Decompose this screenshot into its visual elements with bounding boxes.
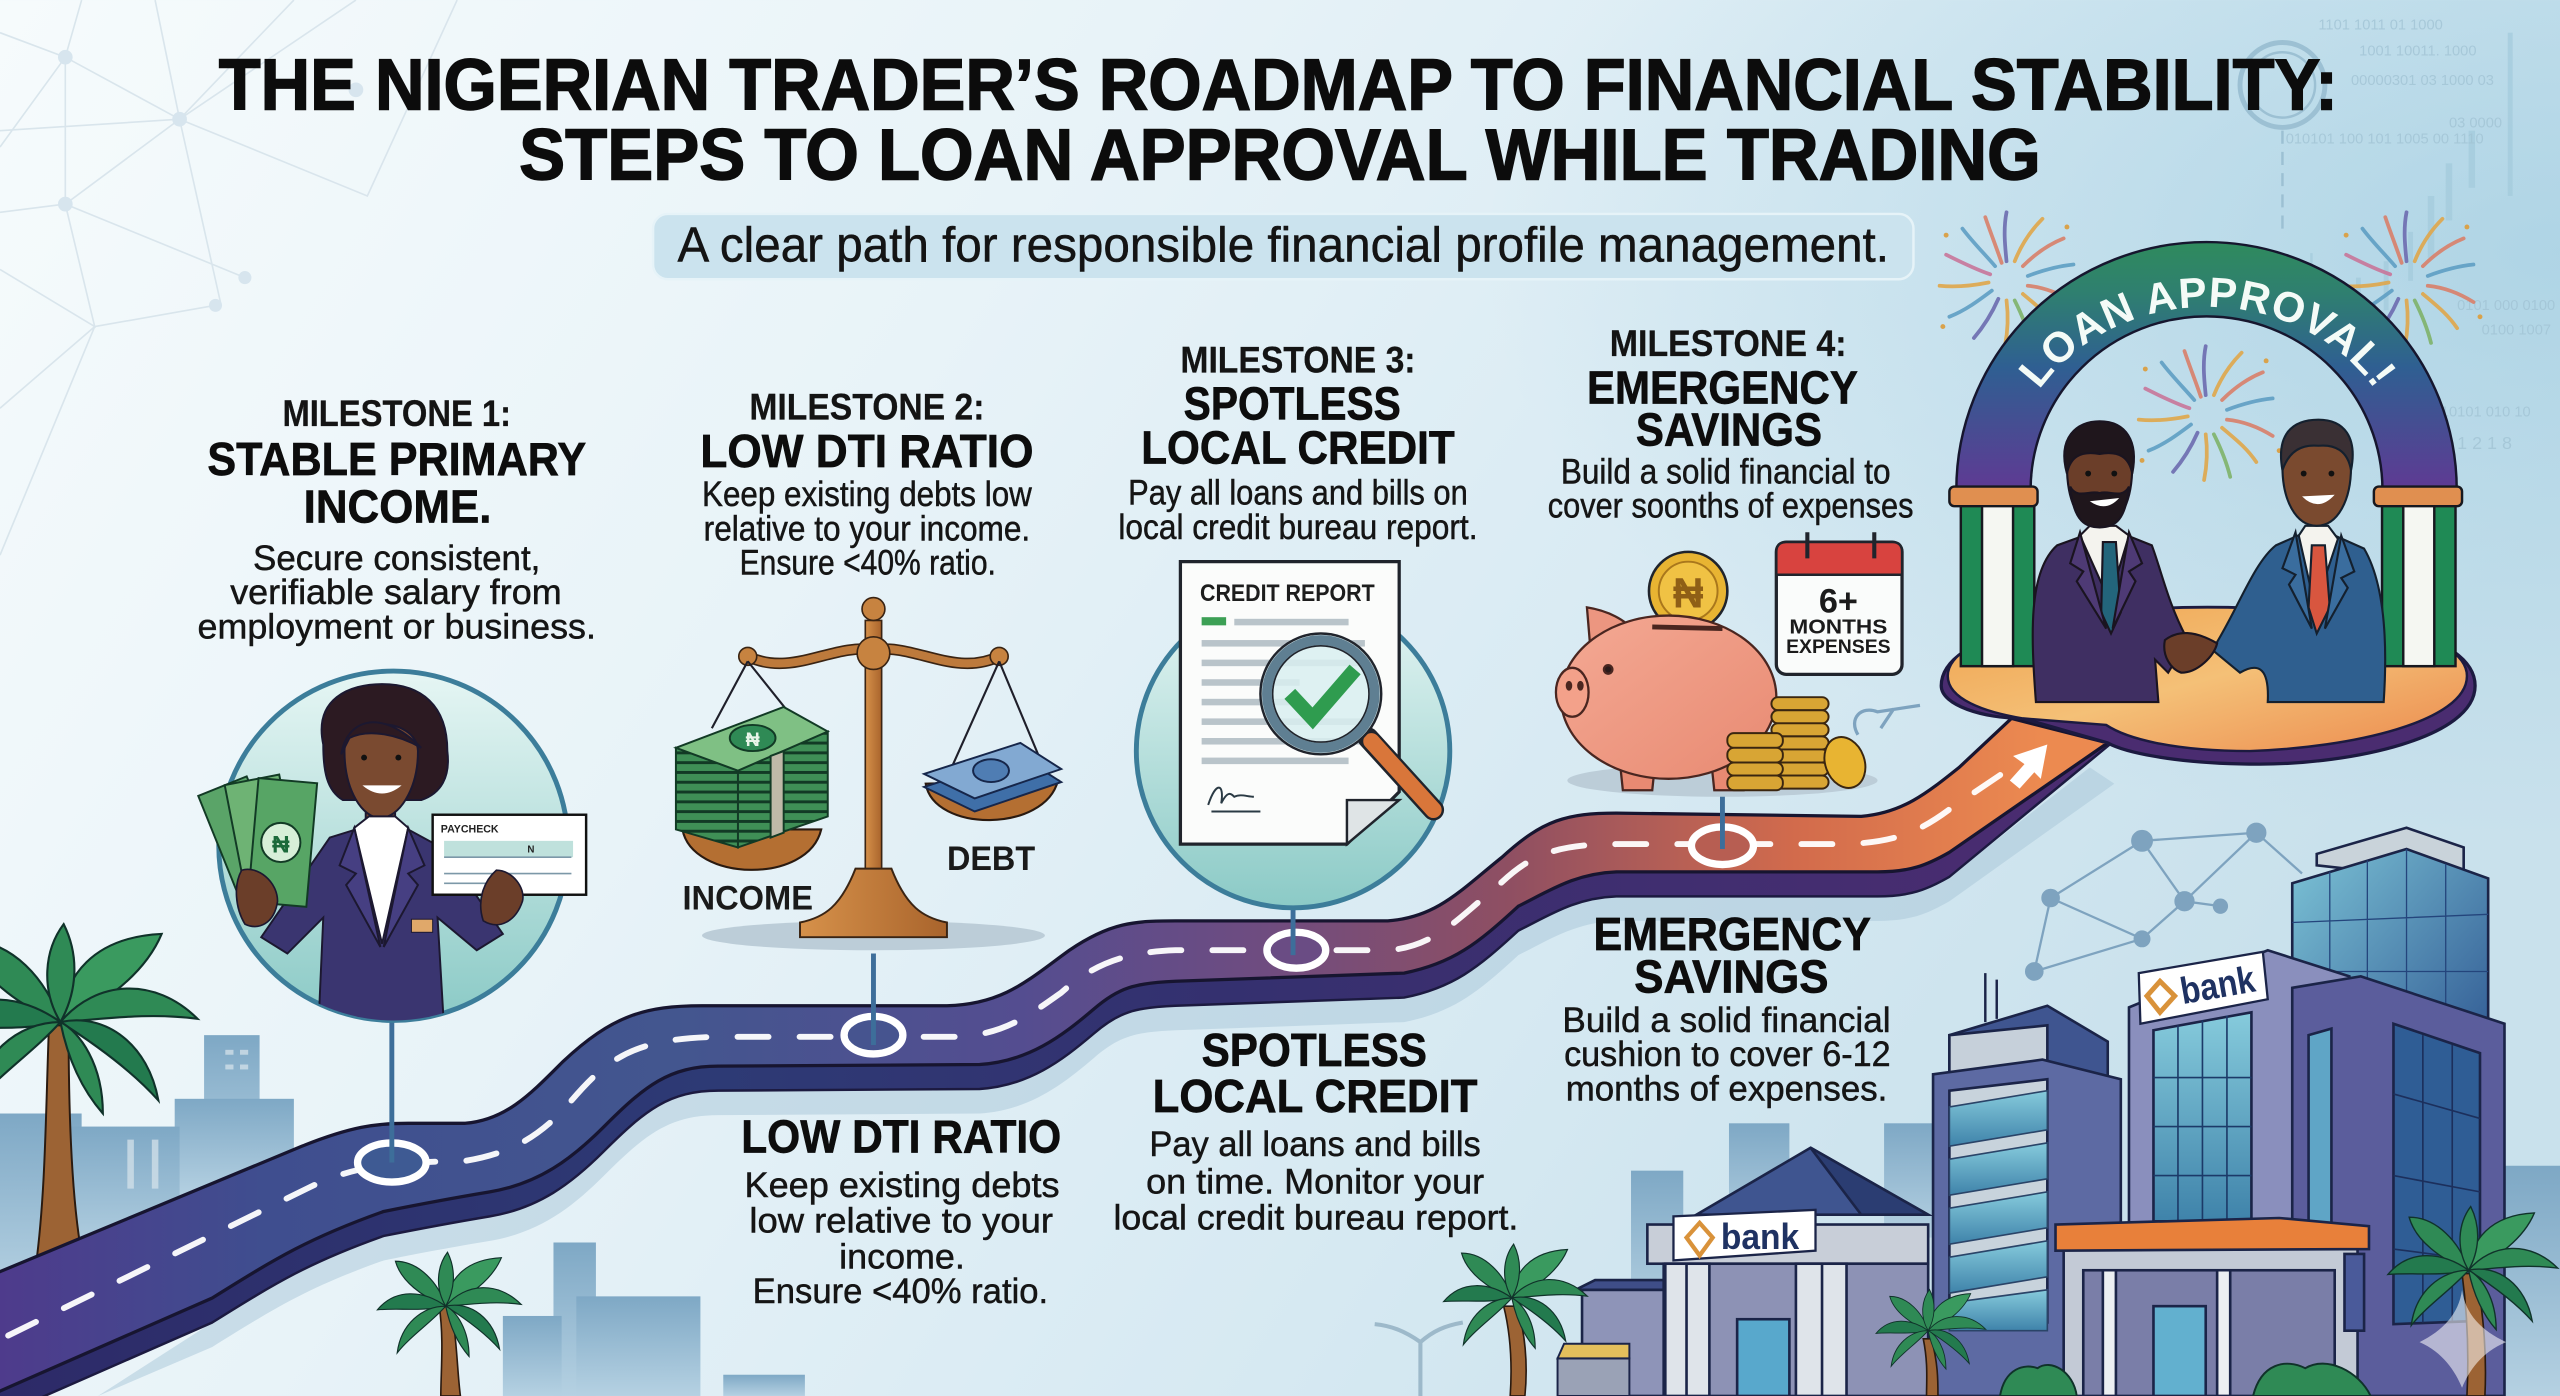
trading chart and binary data top right: 1101 1011 01 1000 <box>2318 17 2443 33</box>
milestone 3 text: MILESTONE 3: <box>1180 339 1416 380</box>
milestone ring 1 <box>358 1143 426 1182</box>
arrow on road <box>2010 745 2047 789</box>
mid bank building <box>1933 973 2121 1396</box>
road surface <box>0 718 2108 1396</box>
trading chart and binary data top right: 10101 010 10 <box>2441 404 2531 420</box>
main glass <box>2153 1012 2251 1221</box>
connector 1 <box>390 1022 393 1162</box>
scale beam <box>748 649 999 663</box>
scale base <box>800 869 947 937</box>
debt bills <box>924 743 1061 811</box>
loan approval arch: LOAN APPROVAL! <box>2018 278 2396 388</box>
small bank building <box>1576 1148 1928 1396</box>
milestone 3 text: SPOTLESS <box>1184 378 1401 430</box>
connector 3 <box>1292 906 1295 955</box>
low dti text below road: income. <box>839 1238 965 1277</box>
milestone 1 illustration <box>198 671 586 1029</box>
right pan <box>926 780 1058 820</box>
emergency savings text below road <box>1562 908 1891 1108</box>
savings shadow <box>1567 764 1878 797</box>
road dashes <box>8 764 2016 1336</box>
milestone 4 savings illustration <box>1556 532 1920 797</box>
atm box <box>1558 1344 1629 1396</box>
small bank sign <box>1673 1210 1816 1260</box>
milestone 1 text: employment or business. <box>198 607 596 646</box>
milestone 2 text: relative to your income. <box>704 509 1030 548</box>
palm tree right <box>2388 1207 2558 1396</box>
left hand <box>236 869 278 927</box>
milestone 4 text: MILESTONE 4: <box>1610 323 1847 364</box>
trading chart and binary data top right: 03 0000 <box>2449 115 2502 131</box>
handshake <box>2164 633 2217 673</box>
left pan <box>682 829 821 870</box>
calendar: 6+ <box>1819 582 1858 620</box>
network pattern near banks <box>2026 824 2302 980</box>
businessman right <box>2212 420 2385 702</box>
money fan <box>198 775 317 907</box>
spotless credit text below road: SPOTLESS <box>1202 1024 1427 1076</box>
emergency savings text below road: SAVINGS <box>1634 951 1829 1003</box>
main bank building left wing <box>2129 950 2349 1225</box>
firework left <box>1940 212 2082 346</box>
scale shadow <box>702 921 1045 950</box>
milestone 1 text: INCOME. <box>304 480 491 532</box>
loan approval arch <box>1955 240 2458 486</box>
road edge band <box>0 743 2108 1396</box>
big palm tree left <box>0 924 198 1265</box>
report title: CREDIT REPORT <box>1200 581 1375 607</box>
milestone 4 text: Build a solid financial to <box>1561 452 1891 491</box>
emergency savings text below road: EMERGENCY <box>1593 908 1871 960</box>
milestone 1 text: STABLE PRIMARY <box>207 433 586 485</box>
spotless credit text below road: LOCAL CREDIT <box>1153 1070 1478 1122</box>
right hand <box>481 870 523 925</box>
trading chart and binary data top right: 010101 100 101 1005 00 1110 <box>2286 132 2484 148</box>
palm tree middle <box>1876 1290 1986 1396</box>
milestone 2 text: Keep existing debts low <box>702 475 1032 514</box>
emergency savings text below road: Build a solid financial <box>1562 1001 1891 1040</box>
milestone 1 text <box>198 393 596 646</box>
trading chart and binary data top right: 0101 000 0100 <box>2457 298 2555 314</box>
milestone 3 text <box>1118 339 1478 547</box>
milestone 3 text: LOCAL CREDIT <box>1141 422 1455 474</box>
shrubs <box>2000 1364 2371 1396</box>
milestone 4 text: cover soonths of expenses <box>1548 487 1913 526</box>
milestone ring 3 <box>1267 932 1326 968</box>
network pattern top left <box>0 0 457 555</box>
arch pillars <box>1961 505 2456 666</box>
city skyline right <box>1631 1123 2560 1396</box>
bank lobby and canopy <box>2056 1218 2369 1396</box>
arch capitals <box>1949 487 2462 506</box>
emergency savings text below road: cushion to cover 6-12 <box>1564 1035 1891 1074</box>
spotless credit text below road: local credit bureau report. <box>1113 1198 1518 1237</box>
piggy bank <box>1556 607 1776 790</box>
paycheck <box>433 815 586 895</box>
trading chart and binary data top right: 1001 10011. 1000 <box>2359 44 2477 60</box>
road shadow <box>98 767 2114 1396</box>
loan approval platform <box>1941 607 2475 764</box>
milestone 1 text: verifiable salary from <box>230 573 562 612</box>
woman <box>261 684 503 1029</box>
city skyline left <box>0 1035 294 1293</box>
coin stacks <box>1727 697 1872 794</box>
calendar: MONTHS <box>1789 617 1887 639</box>
emergency savings text below road: months of expenses. <box>1566 1069 1887 1108</box>
calendar: EXPENSES <box>1786 636 1891 658</box>
report document <box>1180 562 1399 844</box>
trading chart and binary data top right <box>2240 17 2555 453</box>
circle background <box>219 671 568 1020</box>
title <box>219 44 2338 196</box>
milestone ring 2 <box>844 1016 903 1054</box>
title: THE NIGERIAN TRADER’S ROADMAP TO FINANCIAL STABILITY: <box>219 44 2338 125</box>
scale post <box>865 620 882 898</box>
bank tower back <box>2292 828 2488 1078</box>
milestone 2 text: LOW DTI RATIO <box>700 425 1033 477</box>
subtitle pill: A clear path for responsible financial profile management. <box>678 218 1889 272</box>
milestone 4 text: SAVINGS <box>1636 404 1822 456</box>
businessman left <box>2033 421 2188 702</box>
firework right <box>2340 212 2482 346</box>
trading chart and binary data top right: 00000301 03 1000 03 <box>2351 73 2494 89</box>
title: STEPS TO LOAN APPROVAL WHILE TRADING <box>519 115 2041 196</box>
connector 4 <box>1721 790 1724 849</box>
milestone 3 text: local credit bureau report. <box>1118 508 1478 547</box>
palm tree near bank <box>1444 1244 1587 1396</box>
circle background <box>1136 594 1450 908</box>
milestone 4 text <box>1548 323 1913 526</box>
gold coin: ₦ <box>1673 569 1704 616</box>
milestone 1 text: Secure consistent, <box>253 539 540 578</box>
milestone ring 4 <box>1691 827 1753 865</box>
milestone 3 text: Pay all loans and bills on <box>1128 474 1468 513</box>
money stack: ₦ <box>746 729 760 751</box>
gold coin <box>1649 552 1727 630</box>
milestone 2 balance scale <box>676 598 1061 950</box>
road <box>0 718 2114 1396</box>
paycheck: PAYCHECK <box>441 824 499 836</box>
spotless credit text below road <box>1113 1024 1518 1237</box>
milestone 2 text: MILESTONE 2: <box>749 387 984 428</box>
income label: INCOME <box>682 879 813 917</box>
milestone 1 text: MILESTONE 1: <box>282 393 511 434</box>
debt label: DEBT <box>947 840 1035 878</box>
firework center <box>2139 346 2282 480</box>
low dti text below road: LOW DTI RATIO <box>741 1111 1061 1163</box>
spotless credit text below road: on time. Monitor your <box>1146 1163 1484 1202</box>
signature <box>1208 788 1260 811</box>
milestone 4 text: EMERGENCY <box>1587 361 1858 413</box>
trading chart and binary data top right: 0100 1007 <box>2482 323 2551 339</box>
bank right wing <box>2292 976 2504 1396</box>
city skyline bottom <box>503 1242 805 1396</box>
trading chart and binary data top right: 1 2 1 8 <box>2457 433 2512 453</box>
report fold <box>1347 800 1399 844</box>
main bank sign <box>2139 952 2268 1024</box>
street lamp <box>1375 1322 1463 1396</box>
money stack <box>676 707 828 847</box>
scale knobs <box>739 598 1008 669</box>
small bank sign: bank <box>1721 1216 1799 1257</box>
milestone 2 text: Ensure <40% ratio. <box>740 544 996 583</box>
small palm tree bottom <box>377 1252 521 1396</box>
connector 2 <box>872 954 875 1045</box>
report lines <box>1202 617 1365 764</box>
magnifier <box>1260 634 1433 810</box>
paycheck: N <box>527 844 534 855</box>
milestone 2 text <box>700 387 1033 583</box>
milestone 3 credit report <box>1136 562 1450 908</box>
watermark diamond <box>2420 1290 2506 1388</box>
low dti text below road: Ensure <40% ratio. <box>753 1272 1048 1311</box>
small plane doodle <box>1855 705 1920 735</box>
money fan: ₦ <box>272 831 290 858</box>
low dti text below road <box>741 1111 1061 1311</box>
main bank sign: bank <box>2177 958 2258 1012</box>
low dti text below road: Keep existing debts <box>744 1166 1060 1205</box>
scale strings <box>712 661 1045 771</box>
calendar <box>1776 532 1902 674</box>
low dti text below road: low relative to your <box>749 1202 1053 1241</box>
name badge <box>411 919 433 932</box>
spotless credit text below road: Pay all loans and bills <box>1149 1125 1481 1164</box>
